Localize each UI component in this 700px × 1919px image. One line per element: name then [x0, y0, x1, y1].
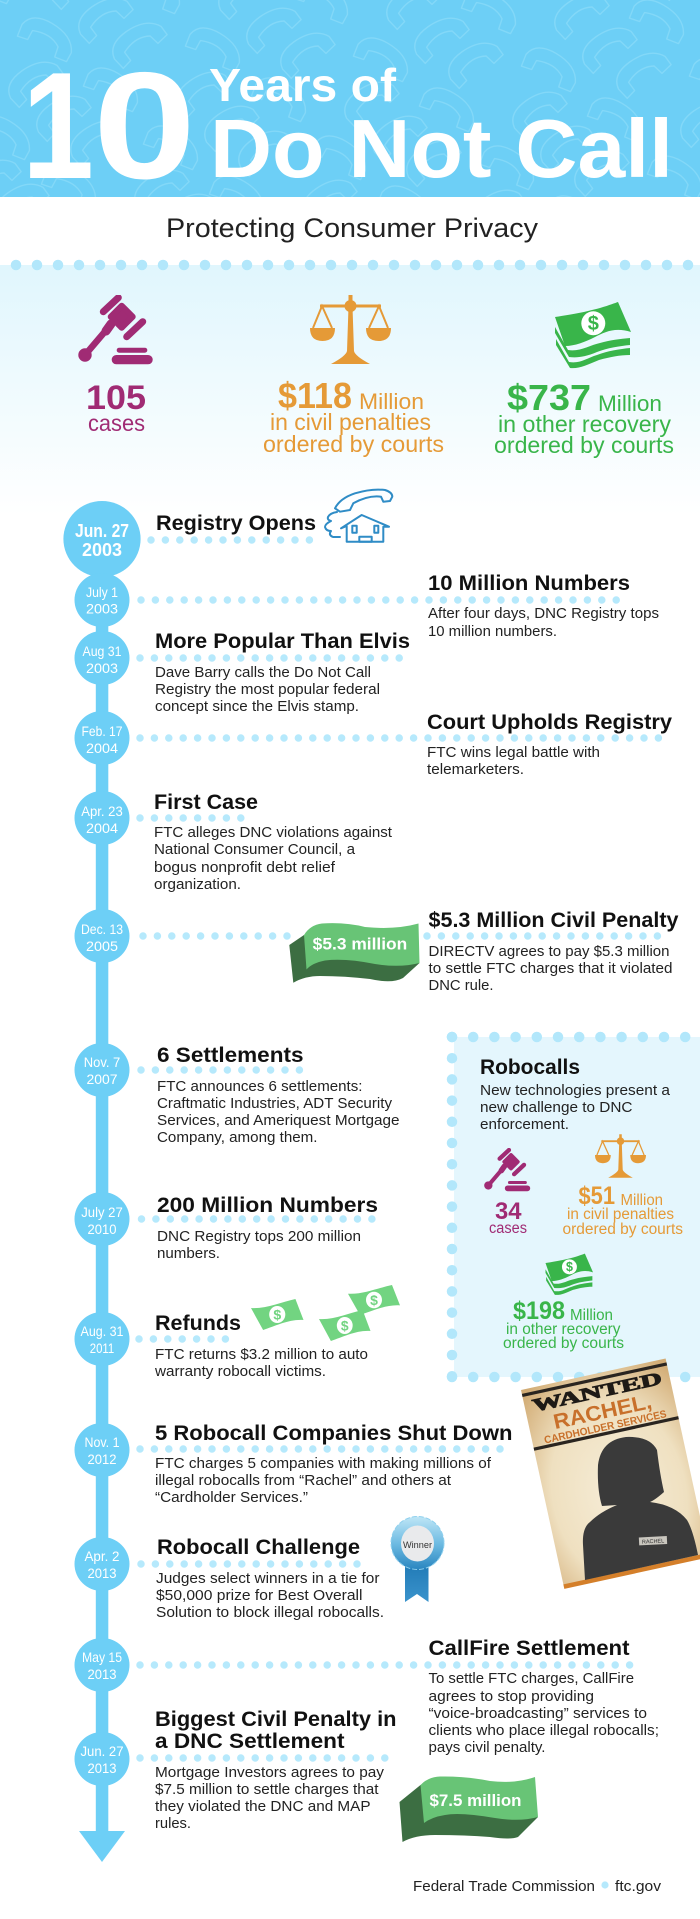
description: concept since the Elvis stamp.: [155, 699, 359, 715]
icon: scales: [310, 295, 391, 364]
stat: $198 million: Million: [570, 1307, 613, 1324]
description: FTC charges 5 companies with making millions of: [155, 1456, 492, 1472]
stat: $737 million: $737: [507, 377, 591, 418]
description: pays civil penalty.: [428, 1740, 546, 1756]
heading: a DNC Settlement: [155, 1730, 345, 1753]
stat: $118 million: Million: [359, 389, 424, 414]
description: New technologies present a: [480, 1083, 671, 1099]
date: Apr. 2: [84, 1548, 120, 1564]
poster text: Cardholder Services: CARDHOLDER SERVICES: [543, 1408, 668, 1447]
stat: 105 cases: [86, 379, 146, 436]
poster text: WANTED: WANTED: [531, 1368, 664, 1416]
event: 200 Million Numbers: [74, 1192, 378, 1262]
date: [81, 1204, 123, 1237]
description: FTC alleges DNC violations against: [154, 825, 392, 841]
stat: $51 million: in civil penalties: [567, 1206, 674, 1223]
heading: [155, 1708, 396, 1753]
date: Apr. 23: [81, 803, 123, 819]
stat: $737 million: ordered by courts: [494, 432, 674, 458]
stat: $51 million: $51: [578, 1182, 615, 1210]
icon: gavel small: [484, 1150, 530, 1191]
date: [84, 1054, 120, 1087]
date: 2010: [88, 1221, 117, 1237]
date: [81, 921, 123, 954]
stat: $737 million: Million: [598, 391, 662, 416]
date: [82, 643, 122, 676]
date: [81, 803, 123, 836]
date: [86, 584, 118, 616]
date: [75, 521, 129, 560]
stat: $198 million: [503, 1297, 624, 1352]
description: [428, 606, 659, 640]
description: Solution to block illegal robocalls.: [156, 1605, 384, 1621]
date: [82, 1649, 122, 1682]
event: CallFire Settlement: CallFire Settlement: [428, 1637, 630, 1660]
date: 2011: [90, 1340, 114, 1356]
description: to settle FTC charges that it violated: [428, 961, 672, 977]
event: Robocall Challenge: Robocall Challenge: [157, 1536, 360, 1559]
description: [154, 825, 392, 893]
date: 2003: [86, 600, 118, 616]
icon: phone and house: [325, 490, 392, 542]
date: 2004: [86, 740, 118, 756]
event: Court Upholds Registry: Court Upholds Registry: [427, 711, 672, 734]
description: [156, 1571, 384, 1621]
description: they violated the DNC and MAP: [155, 1799, 370, 1815]
date: Aug 31: [82, 643, 122, 659]
description: new challenge to DNC: [480, 1100, 632, 1116]
stat: $118 million: [263, 375, 444, 457]
date: Aug. 31: [80, 1323, 124, 1339]
header banner: [0, 0, 700, 197]
stat: $737 million: [494, 377, 674, 458]
wanted poster: [521, 1350, 700, 1589]
description: Company, among them.: [157, 1130, 318, 1146]
timeline spine and arrow: [79, 520, 125, 1862]
stat: $737 million: in other recovery: [498, 411, 671, 437]
description: [157, 1229, 361, 1262]
icon: $5.3 million bill: $5.3 million: [313, 935, 407, 953]
poster text: RACHEL: RACHEL,: [551, 1390, 654, 1434]
description: Craftmatic Industries, ADT Security: [157, 1096, 393, 1112]
date: May 15: [82, 1649, 122, 1665]
description: warranty robocall victims.: [154, 1364, 326, 1380]
event: 6 Settlements: [74, 1043, 400, 1146]
description: [155, 665, 380, 715]
icon: money small: [546, 1254, 593, 1295]
event: More Popular Than Elvis: More Popular Than Elvis: [155, 630, 410, 653]
description: “Cardholder Services.”: [155, 1490, 308, 1506]
event: 5 Robocall Companies Shut Down: 5 Robocall Companies Shut Down: [155, 1422, 512, 1445]
description: [480, 1083, 671, 1133]
name tag: RACHEL: [642, 1538, 664, 1546]
event: Registry Opens: Registry Opens: [156, 512, 316, 535]
date: 2013: [88, 1666, 117, 1682]
date: 2012: [88, 1451, 117, 1467]
footer credit: ftc.gov: [615, 1879, 662, 1895]
description: illegal robocalls from “Rachel” and others at: [155, 1473, 451, 1489]
event: Refunds: [74, 1285, 400, 1380]
event: More Popular Than Elvis: [74, 630, 410, 715]
date: 2003: [82, 540, 122, 560]
description: Dave Barry calls the Do Not Call: [155, 665, 371, 681]
event: Registry Opens: [63, 490, 392, 577]
description: To settle FTC charges, CallFire: [428, 1671, 634, 1687]
event: 6 Settlements: 6 Settlements: [157, 1044, 304, 1067]
stat: $118 million: $118: [278, 375, 352, 416]
date: 2013: [88, 1760, 117, 1776]
title: 10: [22, 41, 196, 211]
event: 5 Robocall Companies Shut Down: [74, 1422, 512, 1506]
description: Registry the most popular federal: [155, 682, 380, 698]
date: July 1: [86, 584, 118, 600]
stat: 34 cases: [489, 1198, 527, 1237]
description: National Consumer Council, a: [154, 842, 356, 858]
description: $50,000 prize for Best Overall: [156, 1588, 362, 1604]
stat: $51 million: [562, 1182, 683, 1238]
event: $5.3 Million Civil Penalty: [74, 909, 679, 994]
event: First Case: [74, 791, 392, 893]
description: clients who place illegal robocalls;: [428, 1723, 659, 1739]
stat: 105 cases: cases: [88, 410, 145, 436]
description: Mortgage Investors agrees to pay: [155, 1765, 385, 1781]
icon: gavel: [78, 298, 153, 364]
title: 10: 0: [93, 41, 196, 211]
date: 2005: [86, 938, 118, 954]
icon: winner ribbon: [391, 1516, 444, 1602]
date: Dec. 13: [81, 921, 123, 937]
description: DIRECTV agrees to pay $5.3 million: [428, 944, 670, 960]
description: organization.: [154, 877, 241, 893]
stat: $118 million: in civil penalties: [270, 409, 431, 435]
stat: $118 million: ordered by courts: [263, 431, 444, 457]
description: numbers.: [157, 1246, 220, 1262]
icon: flying cash: [251, 1285, 400, 1341]
icon: money: [555, 302, 631, 368]
footer credit: [413, 1879, 662, 1895]
title: Years of: Years of: [209, 59, 397, 111]
event: 10 Million Numbers: [74, 572, 659, 640]
event: Biggest Civil Penalty: [74, 1708, 538, 1842]
title: 10: 1: [22, 41, 94, 211]
heading: Biggest Civil Penalty in: [155, 1708, 396, 1731]
icon: $5.3 million bill: [289, 923, 420, 983]
event: Refunds: Refunds: [155, 1312, 241, 1335]
description: bogus nonprofit debt relief: [154, 860, 336, 876]
stat: 34 cases: cases: [489, 1220, 527, 1237]
description: [427, 745, 600, 778]
icon: winner ribbon: Winner: [403, 1540, 432, 1551]
description: enforcement.: [480, 1117, 569, 1133]
description: “voice-broadcasting” services to: [428, 1706, 647, 1722]
date: [80, 1743, 124, 1776]
event: Court Upholds Registry: [74, 711, 672, 778]
description: DNC rule.: [428, 978, 494, 994]
description: [155, 1765, 385, 1832]
description: Services, and Ameriquest Mortgage: [157, 1113, 400, 1129]
description: 10 million numbers.: [428, 624, 557, 640]
event: $5.3 Million Civil Penalty: $5.3 Million Civil Penalty: [428, 909, 679, 932]
date: 2013: [88, 1565, 117, 1581]
date: Nov. 7: [84, 1054, 120, 1070]
stat: $198 million: ordered by courts: [503, 1335, 624, 1352]
date: Jun. 27: [80, 1743, 124, 1759]
date: [84, 1548, 120, 1581]
stat: $51 million: ordered by courts: [562, 1221, 683, 1238]
panel: Robocalls: Robocalls: [480, 1056, 580, 1079]
footer credit: Federal Trade Commission: [413, 1879, 595, 1895]
description: [428, 944, 672, 994]
date: Jun. 27: [75, 521, 129, 541]
icon: $7.5 million bill: [400, 1776, 538, 1842]
description: agrees to stop providing: [428, 1689, 594, 1705]
description: FTC returns $3.2 million to auto: [155, 1347, 368, 1363]
description: After four days, DNC Registry tops: [428, 606, 659, 622]
description: FTC wins legal battle with: [427, 745, 600, 761]
date: [80, 1323, 124, 1356]
stat: $198 million: $198: [513, 1297, 565, 1325]
silhouette: [583, 1437, 698, 1580]
description: telemarketers.: [427, 762, 524, 778]
stat: $51 million: Million: [620, 1192, 663, 1209]
date: [84, 1434, 120, 1467]
event: 10 Million Numbers: 10 Million Numbers: [428, 572, 630, 595]
date: 2007: [86, 1071, 118, 1087]
icon: $7.5 million bill: $7.5 million: [430, 1792, 522, 1810]
date: 2004: [86, 820, 118, 836]
date: Nov. 1: [84, 1434, 120, 1450]
description: [155, 1456, 492, 1506]
subtitle: Protecting Consumer Privacy: [166, 213, 539, 243]
description: [154, 1347, 368, 1380]
event: Robocall Challenge: [74, 1516, 444, 1621]
description: $7.5 million to settle charges that: [155, 1782, 378, 1798]
description: DNC Registry tops 200 million: [157, 1229, 361, 1245]
event: First Case: First Case: [154, 791, 258, 814]
description: rules.: [155, 1816, 191, 1832]
stat: 34 cases: 34: [495, 1198, 522, 1225]
event: 200 Million Numbers: 200 Million Numbers: [157, 1194, 378, 1217]
description: [157, 1079, 400, 1146]
stat: $198 million: in other recovery: [506, 1321, 621, 1338]
date: 2003: [86, 660, 118, 676]
date: July 27: [81, 1204, 123, 1220]
description: Judges select winners in a tie for: [156, 1571, 380, 1587]
icon: scales small: [595, 1134, 646, 1178]
event: CallFire Settlement: [74, 1637, 659, 1756]
description: FTC announces 6 settlements:: [157, 1079, 362, 1095]
title: Do Not Call: Do Not Call: [210, 102, 673, 195]
name tag: [639, 1536, 667, 1546]
summary stats panel: [0, 265, 700, 515]
date: [82, 723, 123, 756]
panel: Robocalls: [452, 1037, 700, 1378]
stat: 105 cases: 105: [86, 379, 146, 417]
description: [428, 1671, 659, 1756]
date: Feb. 17: [82, 723, 123, 739]
